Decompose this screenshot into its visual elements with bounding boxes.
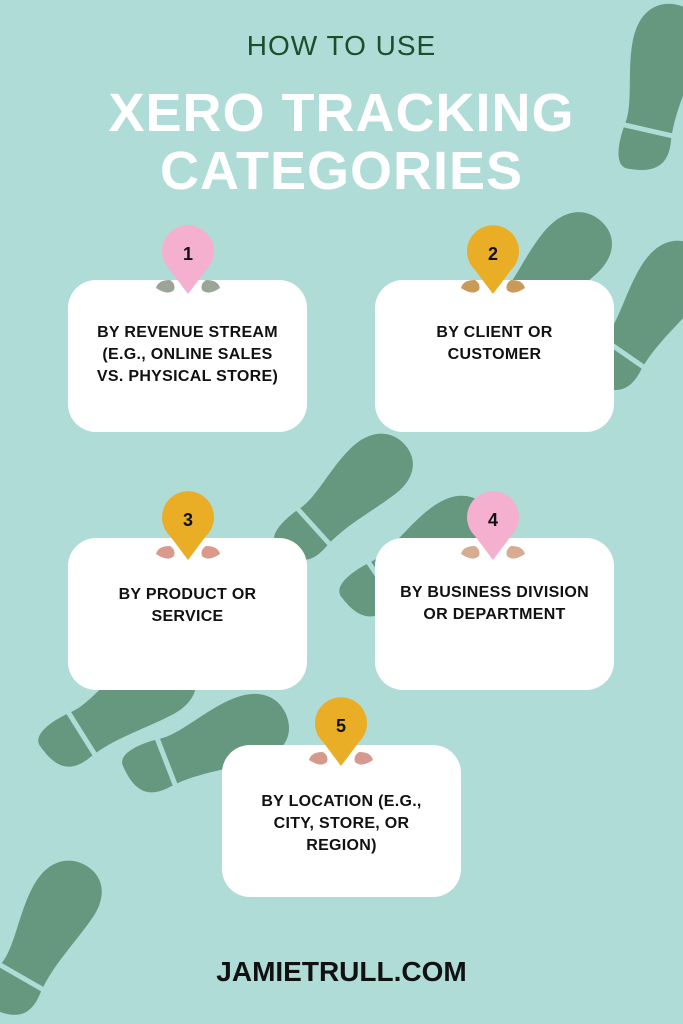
footer: JAMIETRULL.COM [216, 956, 467, 987]
pin 3 [156, 491, 220, 560]
title: how to use: HOW TO USE [247, 30, 436, 61]
card 4: OR DEPARTMENT [423, 606, 566, 623]
card 4 [375, 538, 614, 690]
pin 2: 2 [488, 244, 498, 264]
card 1 [68, 280, 307, 432]
card 5: CITY, STORE, OR [274, 815, 409, 832]
card 5: BY LOCATION (E.G., [261, 793, 422, 810]
pin 5: 5 [336, 716, 346, 736]
card 5 [222, 745, 461, 897]
title: main: CATEGORIES [160, 141, 523, 201]
card 4: BY BUSINESS DIVISION [400, 584, 589, 601]
card 1: BY REVENUE STREAM [97, 324, 278, 341]
card 5: REGION) [306, 837, 377, 854]
pin 1 [156, 225, 220, 294]
pin 4 [461, 491, 525, 560]
card 1: (E.G., ONLINE SALES [102, 346, 273, 363]
card 3 [68, 538, 307, 690]
card 3: SERVICE [151, 608, 224, 625]
card 2 [375, 280, 614, 432]
pin 5 [309, 697, 373, 766]
title: main [108, 83, 574, 201]
pin 2 [461, 225, 525, 294]
pin 4: 4 [488, 510, 498, 530]
pin 3: 3 [183, 510, 193, 530]
card 1: VS. PHYSICAL STORE) [97, 368, 278, 385]
title: main: XERO TRACKING [108, 83, 574, 143]
card 2: BY CLIENT OR [436, 324, 553, 341]
card 3: BY PRODUCT OR [119, 586, 256, 603]
card 2: CUSTOMER [448, 346, 541, 363]
pin 1: 1 [183, 244, 193, 264]
